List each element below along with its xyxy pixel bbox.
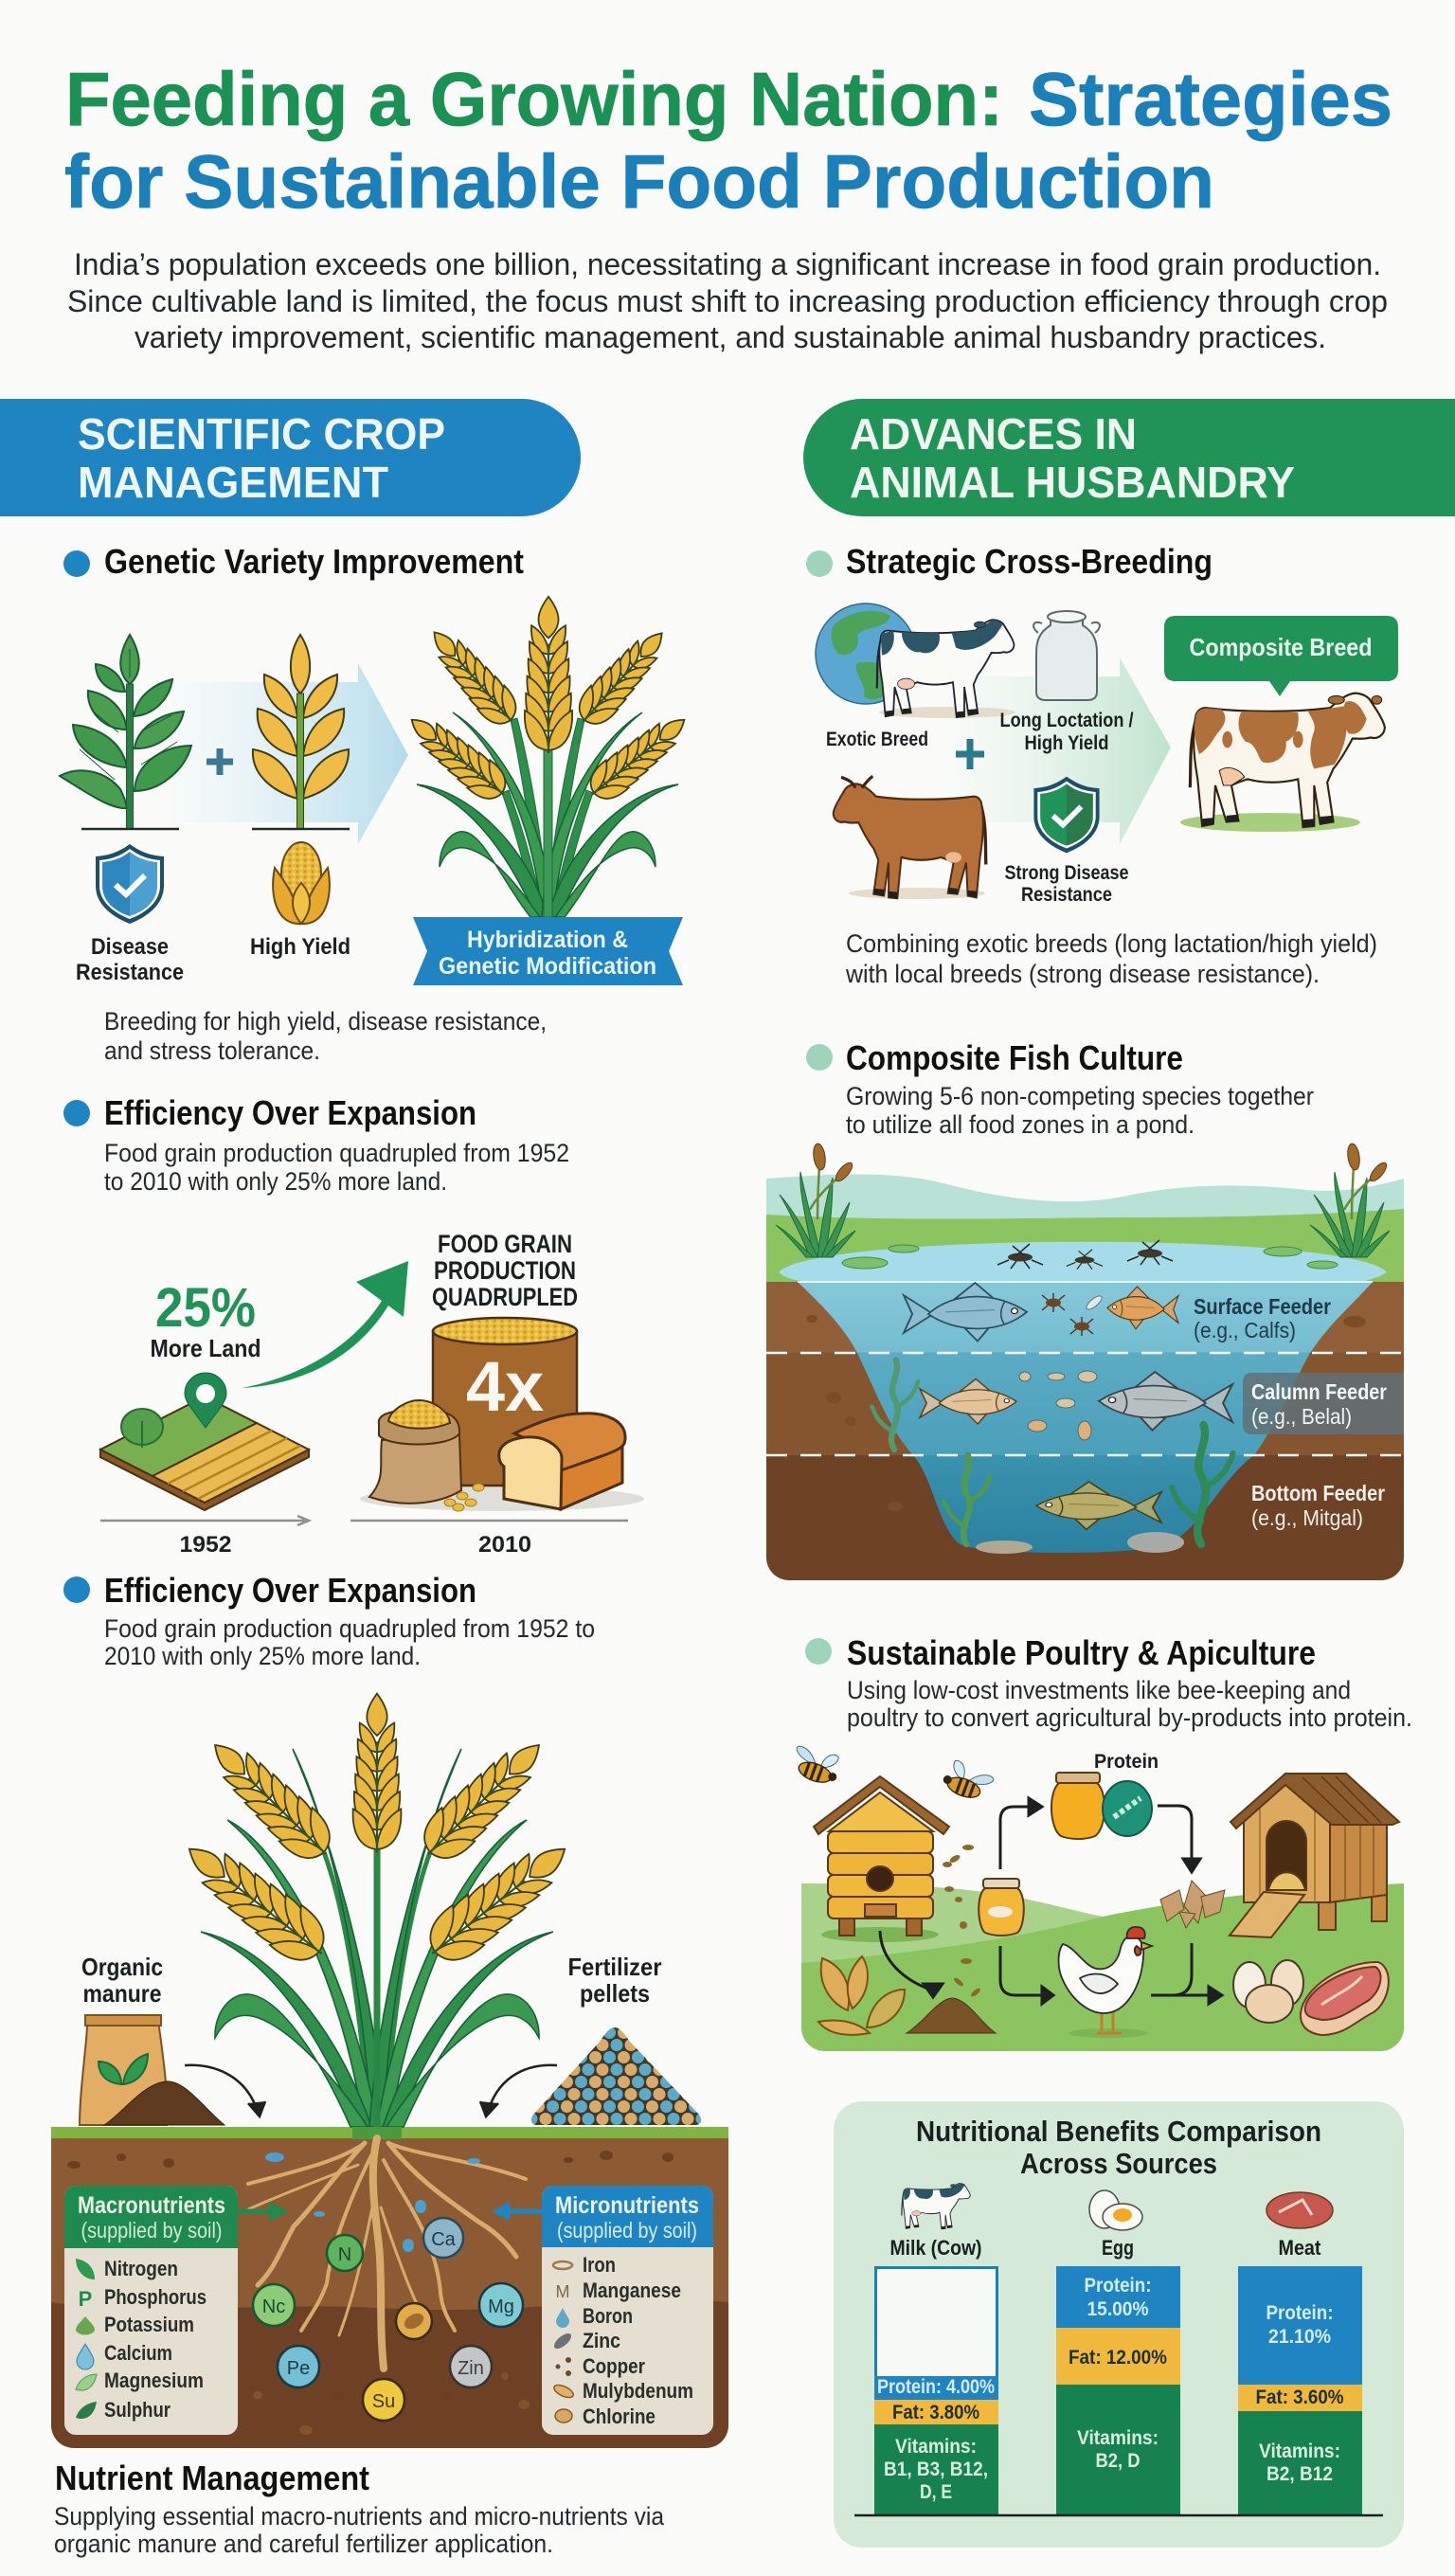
fish: bottom feeder: [1036, 1482, 1161, 1529]
icon: honey jar: [1051, 1773, 1105, 1839]
nutrient ball: Su: [363, 2379, 404, 2421]
labels: parent traits: [76, 934, 350, 985]
icon: beehive: [814, 1776, 949, 1942]
macronutrient list: Nitrogen: [104, 2257, 178, 2280]
label: column feeder: (e.g., Belal): [1251, 1404, 1352, 1429]
macronutrient list: Sulphur: [104, 2398, 171, 2422]
bar: meat: Fat: 3.60%: [1256, 2387, 1344, 2408]
section banner: scientific crop management: SCIENTIFIC CROP: [78, 409, 445, 459]
chart baseline: [854, 2514, 1383, 2516]
macronutrient icons: [76, 2259, 97, 2419]
label: fertilizer pellets: [568, 1953, 661, 2008]
icon: manure pile: [104, 2081, 225, 2125]
ribbon: hybridization: Hybridization &: [467, 927, 628, 953]
icon: hen: [1059, 1927, 1152, 2038]
labels: sources: Meat: [1279, 2236, 1321, 2260]
label: long lactation: High Yield: [1025, 732, 1108, 754]
label: bottom feeder: (e.g., Mitgal): [1251, 1505, 1363, 1530]
intro paragraph: variety improvement, scientific management, and sustainable animal husbandry practices.: [135, 320, 1326, 354]
label: long lactation: Long Loctation /: [1000, 710, 1134, 731]
micronutrient list: Mulybdenum: [583, 2379, 693, 2403]
heading: efficiency over expansion: [63, 1093, 569, 1196]
icon: steak: [1266, 2192, 1333, 2228]
bar: milk: D, E: [920, 2481, 952, 2503]
label: organic manure: manure: [83, 1979, 161, 2008]
icon: holstein cow: [877, 619, 1015, 718]
surface insects: [997, 1240, 1173, 1270]
arrow: micronutrients to roots: [492, 2202, 542, 2221]
diagram: pond cross-section: [766, 1143, 1404, 1580]
macronutrient list: Calcium: [104, 2341, 172, 2365]
heading: poultry and apiculture: poultry to convert agricultural by-products into protein.: [847, 1703, 1412, 1732]
nutrient ball: Zin: Zin: [458, 2358, 484, 2379]
reeds right: [1310, 1143, 1390, 1257]
diagram: hybridization: [60, 597, 695, 985]
micronutrient list: Zinc: [583, 2329, 620, 2352]
nutrient ball: N: [327, 2235, 363, 2271]
diagram: land versus grain: [100, 1230, 644, 1558]
hills: [766, 1175, 1404, 1232]
bar: egg: B2, D: [1095, 2450, 1141, 2472]
timeline 1952: [100, 1516, 309, 1558]
bar: meat: Protein:: [1266, 2302, 1334, 2324]
icon: yellow plant: [252, 635, 350, 829]
arrow: crossing: [171, 663, 408, 844]
label: protein: Protein: [1094, 1751, 1159, 1773]
arrow: manure to soil: [185, 2065, 265, 2117]
macronutrient list: [104, 2257, 207, 2422]
bar: meat: Vitamins:: [1259, 2441, 1340, 2462]
heading: composite fish culture: [806, 1038, 1314, 1139]
icon: corn: [273, 842, 330, 924]
heading: composite fish culture: Composite Fish Culture: [846, 1038, 1183, 1077]
bar: egg: 15.00%: [1087, 2298, 1149, 2320]
label: disease resistance: [1004, 862, 1129, 906]
label: surface feeder: Surface Feeder: [1194, 1294, 1331, 1319]
chart title: Nutritional Benefits Comparison: [916, 2115, 1321, 2148]
icon: small honey jar: [979, 1879, 1024, 1936]
micronutrient icons: [551, 2261, 575, 2423]
icon: wheat grains: [444, 1484, 484, 1511]
ribbon: hybridization: [413, 917, 683, 985]
icon: grain shadow: [360, 1486, 644, 1511]
icon: milk cow: [902, 2183, 970, 2229]
heading: efficiency over expansion repeated: [63, 1571, 595, 1670]
bar: milk: Protein: 4.00%: [877, 2376, 995, 2398]
surface line: [798, 1281, 1373, 1283]
nutrient ball: Nc: Nc: [262, 2297, 285, 2317]
panel: macronutrients: Macronutrients: [78, 2192, 225, 2219]
label: exotic breed: Exotic Breed: [826, 729, 928, 750]
nutrient ball: Mg: [479, 2283, 523, 2327]
label: bottom feeder: Bottom Feeder: [1251, 1481, 1385, 1505]
icon: grain barrel: [433, 1318, 577, 1486]
nutrient ball: Pe: [278, 2346, 319, 2387]
label: quadrupled: PRODUCTION: [434, 1256, 576, 1285]
macronutrient icons: P: [79, 2287, 92, 2311]
fish: column feeder tan: [920, 1379, 1016, 1424]
macronutrient list: Potassium: [104, 2313, 194, 2336]
heading: efficiency over expansion: to 2010 with only 25% more land.: [104, 1167, 447, 1196]
plankton and bugs: [1019, 1293, 1104, 1440]
icon: plus: [956, 739, 984, 769]
icon: shield: [96, 844, 164, 924]
stat: 25 percent more land: [150, 1277, 261, 1362]
label: bottom feeder: [1251, 1481, 1385, 1530]
labels: sources: Milk (Cow): [890, 2236, 981, 2260]
bar: milk: Fat: 3.80%: [892, 2402, 979, 2423]
nutrient ball: Zin: [450, 2346, 492, 2387]
text: cross-breeding: with local breeds (strong disease resistance).: [845, 960, 1320, 988]
text: breeding: and stress tolerance.: [104, 1036, 320, 1065]
icon: eggs: [1233, 1960, 1303, 2023]
timeline 2010: 2010: [478, 1532, 531, 1558]
heading: efficiency over expansion repeated: 2010 with only 25% more land.: [104, 1642, 421, 1670]
arrow: pellets to soil: [480, 2065, 557, 2117]
label: quadrupled: [432, 1230, 578, 1311]
bar: meat: 21.10%: [1268, 2326, 1331, 2348]
heading: efficiency over expansion repeated: Efficiency Over Expansion: [104, 1571, 476, 1610]
text: cross-breeding: Combining exotic breeds (long lactation/high yield): [846, 929, 1377, 958]
nutrient ball: Nc: [253, 2284, 295, 2326]
text: breeding: Breeding for high yield, disease resistance,: [104, 1007, 547, 1036]
section banner: advances in animal husbandry: ADVANCES IN: [850, 409, 1137, 459]
text: cross-breeding: [845, 929, 1377, 988]
arrow: growth: [242, 1261, 408, 1388]
nutrient ball: seed: [396, 2303, 432, 2339]
icon: bread: [499, 1414, 625, 1509]
stat: 25 percent more land: More Land: [150, 1334, 261, 1362]
title: for Sustainable Food Production: [64, 139, 1214, 224]
bank grass: [766, 1209, 1404, 1285]
heading: efficiency over expansion repeated: Food grain production quadrupled from 1952 to: [104, 1614, 595, 1643]
micronutrient list: Boron: [583, 2304, 633, 2328]
nutrient ball: Ca: [423, 2218, 463, 2258]
micronutrient list: [583, 2253, 693, 2428]
callout: composite breed: Composite Breed: [1190, 633, 1372, 661]
panel: macronutrients: (supplied by soil): [81, 2218, 222, 2243]
nutrient ball: N: N: [338, 2244, 351, 2265]
title: Feeding a Growing Nation:: [65, 57, 1003, 141]
intro paragraph: Since cultivable land is limited, the focus must shift to increasing production efficiency through crop: [67, 284, 1388, 318]
fish: surface feeder small: [1107, 1287, 1178, 1329]
nutrient ball: Pe: Pe: [287, 2358, 310, 2379]
icon: boiled egg: [1089, 2190, 1142, 2230]
icon: crop by-products: [818, 1956, 905, 2035]
chart title: [916, 2115, 1321, 2180]
label: surface feeder: [1194, 1294, 1331, 1342]
panel: micronutrients: Micronutrients: [555, 2192, 699, 2219]
icon: globe: [816, 603, 916, 704]
nutrient ball: Su: Su: [372, 2391, 395, 2412]
icon: green shield: [1033, 777, 1100, 853]
soil layers: [766, 1282, 1404, 1580]
label: quadrupled: FOOD GRAIN: [438, 1230, 572, 1258]
icon: hybrid wheat: [401, 597, 695, 917]
bar: milk: B1, B3, B12,: [884, 2459, 988, 2480]
icon: bee left: [788, 1741, 844, 1788]
scattered seeds: [943, 1845, 981, 1998]
label: disease resistance: Resistance: [1021, 884, 1112, 906]
icon: composite cow: [1180, 694, 1385, 832]
bar: egg: Fat: 12.00%: [1069, 2347, 1167, 2369]
text: breeding: [104, 1007, 547, 1065]
diagram: cross-breeding: [816, 603, 1398, 906]
callout: composite breed: [1164, 616, 1398, 696]
bar: milk: [874, 2268, 998, 2515]
icon: manure bag: [80, 2015, 167, 2125]
icon: local brown cow: [834, 776, 986, 899]
label: organic manure: Organic: [81, 1953, 163, 1981]
fish: column feeder grey: [1099, 1372, 1232, 1431]
diagram: poultry and bee cycle: [788, 1741, 1404, 2051]
label: column feeder: [1243, 1373, 1404, 1434]
text: nutrient management: [54, 2459, 665, 2558]
heading: strategic cross-breeding: Strategic Cross-Breeding: [846, 542, 1212, 581]
label: disease resistance: Strong Disease: [1004, 862, 1129, 884]
macronutrient list: Phosphorus: [104, 2285, 207, 2309]
section banner: scientific crop management: MANAGEMENT: [78, 458, 388, 507]
panel: macronutrients: [64, 2186, 238, 2435]
icon: fertilizer pellets: [531, 2027, 701, 2125]
labels: sources: Egg: [1102, 2236, 1134, 2260]
ribbon: hybridization: Genetic Modification: [439, 953, 656, 980]
micronutrient list: Copper: [583, 2354, 645, 2378]
section banner: advances in animal husbandry: ANIMAL HUSBANDRY: [850, 458, 1295, 507]
heading: poultry and apiculture: Sustainable Poultry & Apiculture: [847, 1633, 1316, 1672]
fish: surface feeder large: [904, 1283, 1027, 1342]
text: nutrient management: Nutrient Management: [55, 2459, 369, 2497]
icon: compost pile: [907, 1998, 996, 2033]
title: Strategies: [1029, 57, 1392, 141]
micronutrient icons: M: [555, 2282, 570, 2301]
bar: milk: Vitamins:: [895, 2436, 977, 2458]
icon: grain barrel: 4x: [466, 1347, 544, 1426]
bar: meat: B2, B12: [1266, 2463, 1333, 2485]
section banner: scientific crop management: [0, 399, 581, 516]
icon: map pin: [185, 1373, 226, 1428]
icon: sack: [369, 1400, 461, 1504]
roots: [248, 2127, 526, 2369]
reeds left: [776, 1143, 855, 1257]
nutrient ball: Mg: Mg: [488, 2297, 514, 2317]
arrow: macronutrients to roots: [238, 2202, 289, 2221]
icon: feed scraps: [1160, 1881, 1225, 1928]
labels: parent traits: High Yield: [250, 934, 350, 960]
timeline 1952: 1952: [180, 1532, 231, 1558]
bar: egg: [1056, 2266, 1180, 2515]
text: nutrient management: organic manure and careful fertilizer application.: [54, 2530, 553, 2558]
soil: [51, 2127, 728, 2448]
arrow: to composite breed: [947, 658, 1171, 844]
micronutrient list: Manganese: [583, 2279, 681, 2302]
label: surface feeder: (e.g., Calfs): [1194, 1318, 1296, 1342]
zone dividers: [766, 1353, 1404, 1455]
icon: wheat plant: [173, 1694, 581, 2127]
icon: milk can: [1033, 611, 1100, 700]
label: fertilizer pellets: Fertilizer: [568, 1953, 661, 1981]
pond water: [798, 1282, 1373, 1553]
icon: field: [100, 1396, 309, 1510]
heading: poultry and apiculture: [805, 1633, 1412, 1732]
arrows: cycle flow: [880, 1798, 1222, 2004]
ground: [801, 1883, 1404, 2051]
chart title: Across Sources: [1020, 2147, 1217, 2180]
water plants: [872, 1360, 1233, 1554]
label: organic manure: [81, 1953, 163, 2008]
intro paragraph: India’s population exceeds one billion, necessitating a significant increase in food grain production.: [74, 247, 1381, 281]
panel: nutritional comparison: [834, 2101, 1404, 2548]
icon: bee right: [940, 1758, 996, 1804]
heading: composite fish culture: Growing 5-6 non-competing species together: [846, 1082, 1314, 1110]
labels: parent traits: Disease: [91, 934, 169, 960]
icon: protein badge: [1103, 1781, 1152, 1836]
section banner: advances in animal husbandry: [803, 399, 1455, 516]
micronutrient list: Iron: [583, 2253, 616, 2277]
intro paragraph: [67, 247, 1388, 354]
bar: meat: [1238, 2266, 1362, 2515]
title: [64, 57, 1392, 224]
nutrient ball: Ca: Ca: [431, 2229, 457, 2250]
micronutrient list: Chlorine: [583, 2405, 656, 2428]
bar: egg: Vitamins:: [1077, 2427, 1159, 2449]
diagram: nutrient management: [51, 1694, 728, 2448]
label: quadrupled: QUADRUPLED: [432, 1283, 578, 1311]
water droplets: [265, 2153, 480, 2252]
icon: green plant: [60, 635, 191, 829]
label: column feeder: Calumn Feeder: [1251, 1379, 1387, 1404]
heading: genetic variety improvement: Genetic Variety Improvement: [104, 542, 524, 581]
labels: parent traits: Resistance: [76, 960, 184, 985]
label: fertilizer pellets: pellets: [580, 1979, 650, 2008]
icon: plus: [207, 748, 233, 775]
lily pads: [842, 1245, 1338, 1269]
text: nutrient management: Supplying essential macro-nutrients and micro-nutrients via: [54, 2502, 665, 2531]
icon: meat: [1301, 1962, 1389, 2035]
icon: coop: [1230, 1774, 1399, 1937]
heading: poultry and apiculture: Using low-cost investments like bee-keeping and: [847, 1676, 1351, 1704]
macronutrient list: Magnesium: [104, 2369, 204, 2392]
panel: micronutrients: (supplied by soil): [557, 2218, 697, 2243]
panel: micronutrients: [542, 2186, 713, 2435]
stat: 25 percent more land: 25%: [155, 1277, 256, 1339]
bar: egg: Protein:: [1084, 2275, 1152, 2297]
surface water: [779, 1242, 1387, 1282]
heading: efficiency over expansion: Food grain production quadrupled from 1952: [104, 1139, 569, 1167]
heading: composite fish culture: to utilize all food zones in a pond.: [846, 1110, 1195, 1139]
labels: sources: [890, 2236, 1321, 2260]
heading: efficiency over expansion: Efficiency Over Expansion: [104, 1093, 476, 1132]
label: long lactation: [1000, 710, 1134, 754]
